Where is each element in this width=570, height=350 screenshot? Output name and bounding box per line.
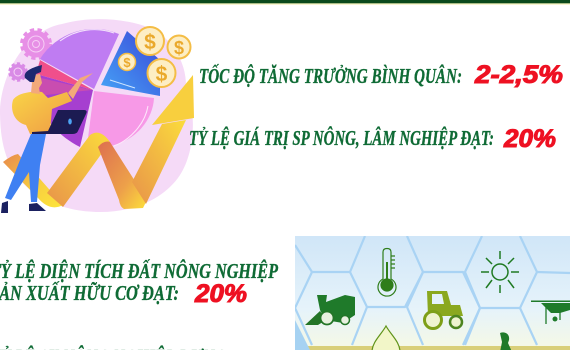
icon: water drop xyxy=(372,326,400,350)
icon: tractor xyxy=(424,291,463,328)
coin three: $ xyxy=(123,55,131,70)
illustration: analyst with pie chart and growth arrow xyxy=(0,19,194,213)
field strip xyxy=(295,346,570,350)
coin two: $ xyxy=(174,38,184,58)
organic farmland value: 20% xyxy=(194,280,247,308)
smart farming photo panel xyxy=(295,236,570,350)
icon: harvester xyxy=(305,295,355,325)
shoes xyxy=(1,201,46,213)
top header bar xyxy=(0,0,570,5)
organic farmland line one: TỶ LỆ DIỆN TÍCH ĐẤT NÔNG NGHIỆP xyxy=(0,259,278,283)
text: organic farmland share xyxy=(0,259,278,308)
icon: plant sprout xyxy=(500,332,512,350)
text: growth rate xyxy=(199,61,563,89)
coin one: $ xyxy=(144,31,156,54)
coins xyxy=(118,27,190,87)
icon: sun xyxy=(481,251,519,293)
head xyxy=(28,74,42,94)
hair xyxy=(25,65,42,82)
growth arrow ribbon xyxy=(3,75,194,209)
person xyxy=(1,65,93,213)
hexagon grid xyxy=(295,236,570,345)
sky background xyxy=(295,236,570,350)
legs xyxy=(5,134,46,202)
icon: small gear xyxy=(10,64,26,80)
icon: thermometer xyxy=(378,248,396,296)
shirt xyxy=(12,92,72,134)
laptop xyxy=(32,110,87,134)
growth rate value: 2-2,5% xyxy=(474,61,563,89)
lower left glow xyxy=(295,320,310,350)
laptop logo xyxy=(68,118,72,124)
growth rate label: TỐC ĐỘ TĂNG TRƯỞNG BÌNH QUÂN: xyxy=(199,64,462,88)
background blob xyxy=(0,19,193,212)
pointing arm xyxy=(68,73,93,99)
icon: large gear xyxy=(22,30,50,58)
icon: drone xyxy=(531,300,570,324)
coin four: $ xyxy=(156,63,168,86)
product value number: 20% xyxy=(503,125,556,153)
pie chart xyxy=(36,29,160,147)
text: agriculture and forestry product value xyxy=(189,125,556,153)
